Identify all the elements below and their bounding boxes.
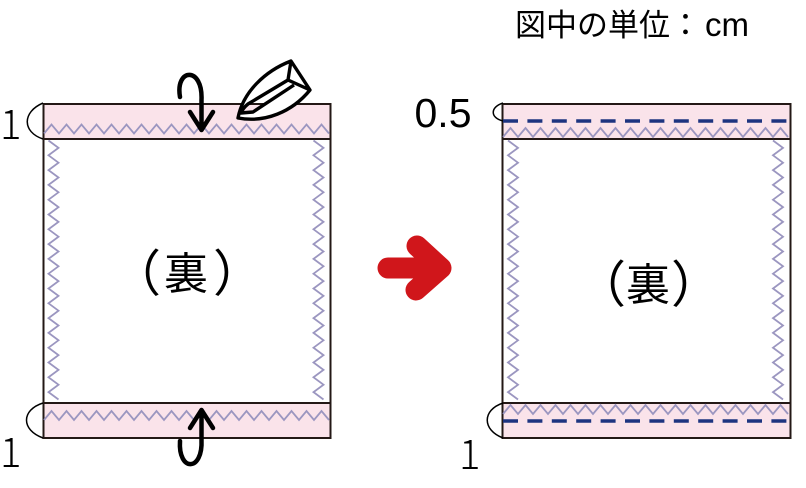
label: reverse side: ） <box>671 257 721 313</box>
top hem band <box>502 104 790 139</box>
left zigzag stitching <box>508 140 518 399</box>
bottom dimension arc <box>487 403 503 438</box>
top dashed stitch line <box>503 119 787 123</box>
left zigzag stitching <box>48 140 58 399</box>
bottom zigzag stitching <box>503 405 788 414</box>
label: top 1: 1 <box>0 93 21 151</box>
right zigzag stitching <box>314 140 324 399</box>
top zigzag stitching <box>44 124 329 134</box>
unit note: cm <box>705 6 749 43</box>
top dimension arc <box>493 103 503 121</box>
label: reverse side <box>576 257 721 313</box>
label: reverse side: （ <box>111 246 161 302</box>
arrow: fold up <box>180 410 213 464</box>
top zigzag stitching <box>503 128 788 137</box>
top hem band <box>44 104 330 139</box>
top dimension arc <box>27 103 43 139</box>
bottom hem band <box>44 403 330 438</box>
bottom hem band <box>502 403 790 438</box>
label: reverse side: ） <box>213 246 263 302</box>
right zigzag stitching <box>773 140 783 399</box>
icon: iron <box>238 61 310 119</box>
label: reverse side: 裏 <box>626 261 670 310</box>
label: 0.5: 0.5 <box>414 90 472 136</box>
label: bottom 1: 1 <box>0 421 21 479</box>
fabric outline <box>44 104 330 438</box>
panel: after stitching <box>414 90 790 481</box>
arrow: next step <box>388 246 441 290</box>
bottom dimension arc <box>26 403 43 438</box>
label: reverse side: 裏 <box>164 250 208 299</box>
arrow: fold down <box>179 75 213 130</box>
bottom zigzag stitching <box>44 411 329 420</box>
label: bottom 1: 1 <box>459 423 480 481</box>
label: reverse side <box>111 246 263 302</box>
bottom dashed stitch line <box>503 419 787 423</box>
unit note: 図中の単位： <box>515 8 701 43</box>
panel: before folding <box>0 61 330 479</box>
fabric outline <box>502 104 790 438</box>
label: reverse side: （ <box>576 257 626 313</box>
